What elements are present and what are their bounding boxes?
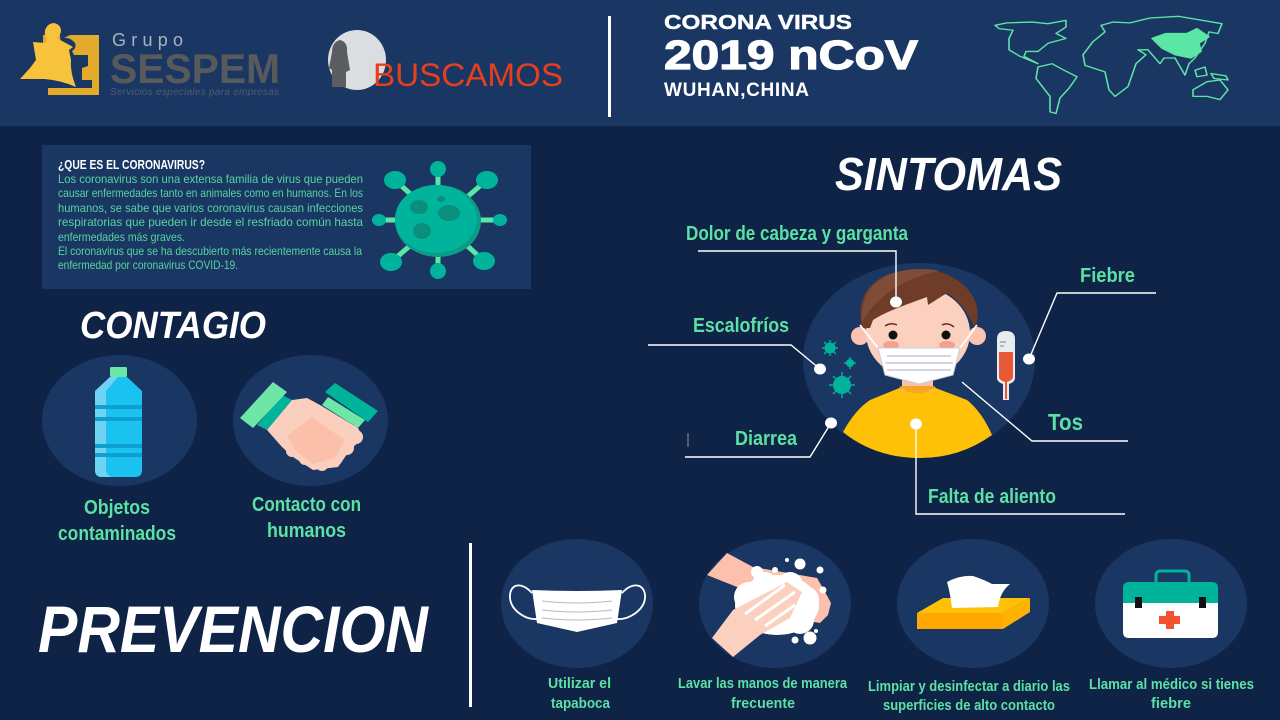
callout: escalofrios: Escalofríos — [693, 315, 789, 337]
symptoms illustration — [803, 263, 1035, 458]
title — [664, 12, 919, 101]
contagio item: objetos contaminados — [42, 355, 197, 545]
label: Llamar al médico si tienes — [1089, 676, 1254, 693]
panel body text: enfermedad por coronavirus COVID-19. — [58, 258, 238, 272]
label: tapaboca — [551, 695, 611, 712]
panel body text: Los coronavirus son una extensa familia de virus que pueden — [58, 172, 363, 186]
logo: yellow puzzle piece — [20, 23, 76, 87]
callout: fiebre: Fiebre — [1080, 265, 1135, 287]
heading: prevencion: PREVENCION — [38, 592, 429, 666]
logo: navy puzzle hole — [43, 35, 92, 95]
icon: thermometer — [997, 331, 1015, 400]
callout: fiebre — [1023, 265, 1156, 364]
callout: escalofrios — [648, 315, 826, 374]
logo: Buscamos — [328, 30, 563, 93]
title: 2019 nCoV — [664, 32, 919, 78]
prevention item: llamar al medico — [1089, 539, 1254, 712]
label — [58, 497, 176, 545]
title: CORONA VIRUS — [664, 12, 852, 34]
header band — [0, 0, 1280, 126]
panel body text: El coronavirus que se ha descubierto más recientemente causa la — [58, 244, 362, 258]
icon: washing hands — [707, 553, 831, 657]
callout: falta de aliento — [910, 418, 1125, 514]
world map — [995, 16, 1228, 114]
prevention item: lavar las manos — [678, 539, 851, 712]
panel body text: humanos, se sabe que varios coronavirus causan infecciones — [58, 201, 363, 215]
panel body text: enfermedades más graves. — [58, 230, 185, 244]
label: Lavar las manos de manera — [678, 675, 848, 692]
face mask — [860, 325, 977, 384]
logo: Grupo SESPEM: Servicios especiales para empresas — [110, 87, 279, 98]
panel heading: ¿QUE ES EL CORONAVIRUS? — [58, 157, 205, 172]
icon: small virus particles — [822, 340, 856, 398]
label: humanos — [267, 520, 346, 542]
child figure — [843, 269, 992, 458]
callout: dolor de cabeza y garganta — [686, 223, 909, 308]
icon: surgical mask — [510, 585, 645, 632]
label: Contacto con — [252, 494, 361, 516]
contagio item: contacto con humanos — [233, 355, 388, 542]
prevention divider — [469, 543, 472, 707]
label: frecuente — [731, 695, 795, 712]
map: China highlighted — [1152, 29, 1209, 58]
label: fiebre — [1151, 695, 1191, 712]
icon: water bottle — [95, 367, 142, 477]
label — [252, 494, 361, 542]
title: WUHAN,CHINA — [664, 80, 809, 101]
label — [548, 675, 611, 712]
callout: diarrea: Diarrea — [735, 428, 798, 450]
panel body text — [58, 172, 363, 272]
label: Utilizar el — [548, 675, 611, 692]
callout: tos — [962, 382, 1128, 441]
icon: virus — [372, 161, 507, 279]
label — [868, 678, 1070, 714]
label: Objetos — [84, 497, 150, 519]
header divider — [608, 16, 611, 117]
logo: Buscamos: BUSCAMOS — [373, 57, 563, 93]
heading: contagio: CONTAGIO — [80, 305, 266, 347]
heading: sintomas: SINTOMAS — [835, 148, 1062, 200]
callout: falta de aliento: Falta de aliento — [928, 486, 1056, 508]
label — [678, 675, 848, 712]
panel: que es el coronavirus — [42, 145, 531, 289]
callout: diarrea — [685, 418, 837, 457]
callout: tos: Tos — [1048, 409, 1083, 435]
icon: medical kit — [1123, 571, 1218, 638]
icon: handshake — [240, 382, 378, 471]
label — [1089, 676, 1254, 712]
label: superficies de alto contacto — [883, 697, 1055, 714]
icon: tissue box — [917, 576, 1030, 629]
logo: Grupo SESPEM: Grupo — [112, 30, 183, 50]
prevention item: tapaboca — [501, 539, 653, 712]
logo: Grupo SESPEM: SESPEM — [110, 45, 280, 92]
panel body text: respiratorias que pueden ir desde el resfriado común hasta — [58, 215, 363, 229]
callout: dolor de cabeza y garganta: Dolor de cabeza y garganta — [686, 223, 909, 245]
prevention item: limpiar y desinfectar — [868, 539, 1070, 714]
label: contaminados — [58, 523, 176, 545]
label: Limpiar y desinfectar a diario las — [868, 678, 1070, 695]
logo: Grupo SESPEM — [20, 23, 280, 98]
panel body text: causar enfermedades tanto en animales como en humanos. En los — [58, 186, 363, 200]
